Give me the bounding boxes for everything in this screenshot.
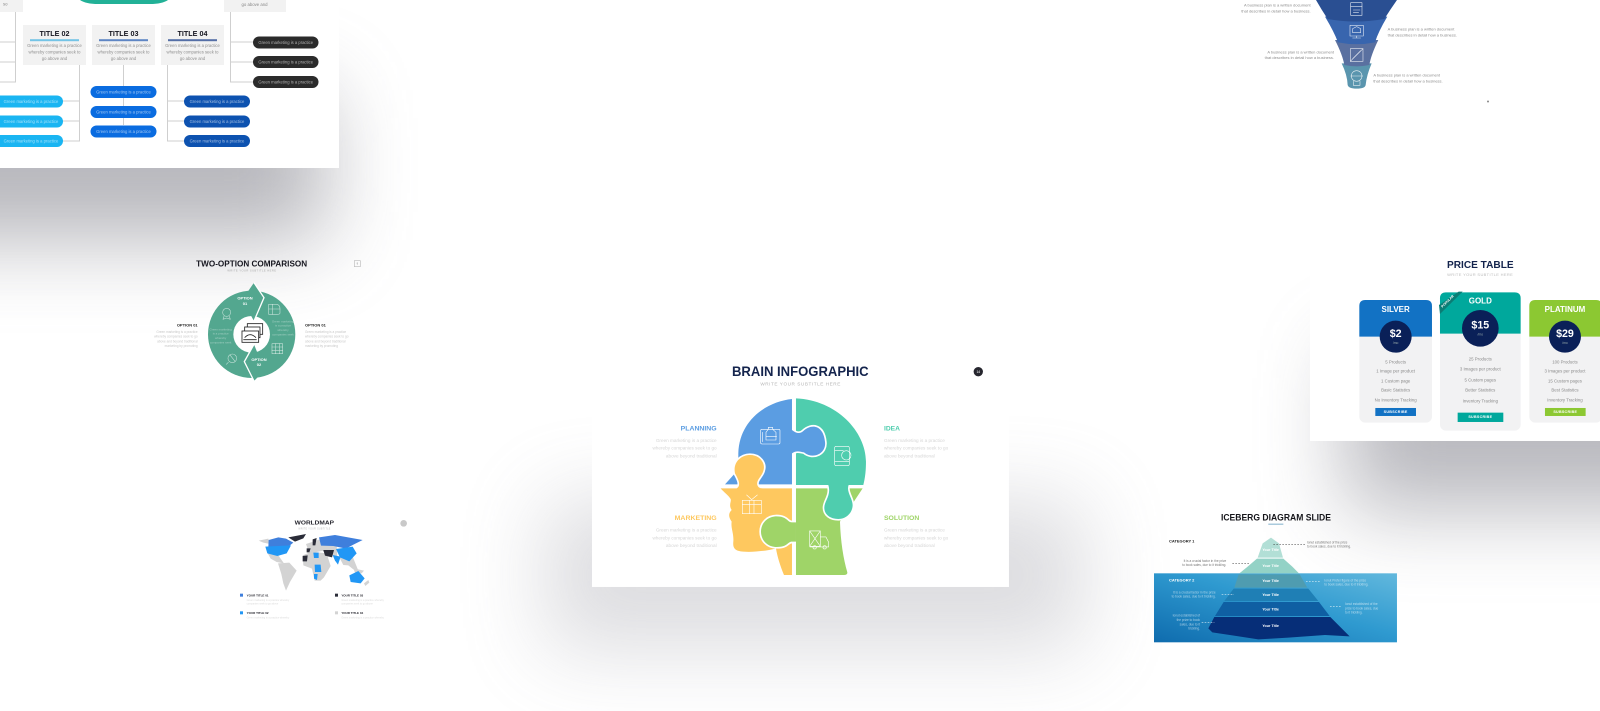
option labels: marketing by promoting [305,344,338,348]
card: silver: No Inventory Tracking [1375,397,1417,402]
heading: WORLDMAP [295,521,334,527]
label: planning: whereby companies seek to go [652,446,717,451]
title boxes: TITLE 04 [178,29,208,38]
category labels [1169,538,1195,583]
cycle chart: is a practice [275,324,291,328]
option labels: whereby companies seek to go [305,335,349,339]
heading: TWO-OPTION COMPARISON [196,258,307,268]
title boxes: go above and [180,56,206,61]
funnel notes: A business plan is a written document [1267,49,1335,54]
card: silver: SUBSCRIBE [1384,410,1408,414]
panel: brain infographic [592,355,1009,587]
card: silver: 1 Image per product [1376,369,1416,374]
card: gold: GOLD [1469,296,1492,305]
connector lines [0,12,253,141]
pills: Green marketing is a practice [96,90,152,94]
pills: Green marketing is a practice [96,110,152,114]
label: planning: above beyond traditional [666,453,717,458]
panel: iceberg diagram [1154,512,1397,642]
option labels: above and beyond traditional [157,339,198,343]
card: gold: Inventory Tracking [1463,398,1499,403]
iceberg layers: Your Title [1262,564,1279,568]
label: solution [884,515,949,548]
page number box [354,261,360,267]
card: silver: SILVER [1382,305,1410,314]
subtitle: WRITE YOUR SUBTITLE HERE [760,382,840,387]
label: planning [652,426,717,458]
funnel icons [1350,3,1363,85]
card: gold: 3 Images per product [1460,367,1502,372]
callouts: sales, due to it [1180,622,1200,626]
legend [240,593,385,620]
callouts: trickling. [1188,627,1200,631]
legend: YOUR TITLE 03 [341,593,364,597]
label: marketing: whereby companies seek to go [652,535,717,540]
icon: truck [810,531,829,549]
page dot [1487,100,1489,102]
heading: BRAIN INFOGRAPHIC [732,363,869,379]
legend: YOUR TITLE 01 [247,593,269,597]
label: idea: IDEA [884,426,900,433]
label: idea: Green marketing is a practice [884,438,945,443]
iceberg layers: Your Title [1262,579,1279,583]
option labels: above and beyond traditional [305,339,346,343]
cycle chart: companies seek [272,332,294,336]
subtitle: WRITE YOUR SUBTITLE HERE [227,269,276,273]
callouts: to book sales, due to it trickling. [1172,594,1216,598]
card: platinum: /mo [1562,341,1568,345]
legend: YOUR TITLE 04 [341,611,364,615]
title boxes: so [3,2,8,6]
card: silver [1359,300,1432,423]
callouts: It is a crucial factor in the prize [1173,590,1216,594]
cycle chart: 02 [257,362,262,367]
pills: Green marketing is a practice [258,40,314,45]
panel: org chart [0,0,339,168]
legend: companies seek to go above [247,603,279,606]
legend: Green marketing is a practice whereby [341,599,385,602]
callouts: the prize to book [1177,618,1200,622]
panel: world map [240,520,407,620]
funnel notes: that describes in detail how a business. [1388,32,1457,37]
pills: Green marketing is a practice [190,138,245,144]
callouts: to book sales, due to it trickling. [1182,563,1226,567]
pills: Green marketing is a practice [190,99,245,104]
background shadows [0,90,1600,650]
label: planning: PLANNING [681,426,717,433]
pills [0,36,318,147]
pills: Green marketing is a practice [96,129,152,134]
page number [400,520,407,527]
iceberg layers: Your Title [1262,608,1279,612]
map [259,534,369,591]
subtitle: WRITE YOUR SUBTITLE HERE [1447,272,1513,277]
card: silver: $2 [1390,328,1402,340]
iceberg layers: Your Title [1262,624,1279,628]
option labels: marketing by promoting [165,344,198,348]
cycle chart: Green marketing [210,327,232,331]
card: silver: Basic Statistics [1381,388,1410,393]
option labels: whereby companies seek to go [154,335,198,339]
option labels: OPTION 01 [177,322,198,327]
title boxes: Green marketing is a practice [96,43,152,48]
label: marketing: above beyond traditional [666,543,717,548]
card: silver: /mo [1393,341,1399,345]
callouts: Ionut established of [1173,614,1200,618]
title boxes: go above and [241,2,268,7]
subtitle: WRITE YOUR SUBTITLE [298,529,331,531]
pills: Green marketing is a practice [4,138,59,144]
funnel notes: A business plan is a written document [1373,73,1441,78]
option labels: Green marketing is a practice [305,330,346,334]
cycle chart: OPTION [237,296,253,301]
category labels: CATEGORY 2 [1169,578,1195,583]
title boxes: go above and [42,56,68,61]
callouts: Ionut established of the [1345,602,1378,606]
callouts: to it trickling. [1345,611,1363,615]
cycle chart [208,283,295,381]
page number: 14 [976,370,980,374]
cycle chart: 01 [243,301,248,306]
funnel bands [1316,0,1397,89]
cycle chart: whereby [215,336,227,340]
card: gold: Better Statistics [1465,388,1495,393]
label: marketing: MARKETING [675,515,717,522]
title boxes: TITLE 03 [108,29,138,38]
cycle chart: OPTION [251,357,267,362]
label: planning: Green marketing is a practice [656,438,717,443]
label: solution: Green marketing is a practice [884,528,945,533]
card: gold: /mo [1478,333,1483,337]
card: platinum [1529,300,1600,423]
option labels: Green marketing is a practice [156,330,198,334]
card: platinum: SUBSCRIBE [1553,410,1578,414]
page number [974,367,983,376]
pills: Green marketing is a practice [4,99,59,104]
icons [223,304,283,364]
cycle chart: is a practice [213,332,229,336]
card: platinum: PLATINUM [1545,305,1586,314]
icon: phone [835,446,851,466]
icon: gift [742,495,761,514]
icon: bag [761,427,780,444]
card: platinum: Best Statistics [1551,388,1579,393]
title boxes: whereby companies seek to [29,50,81,54]
water [1154,573,1397,642]
legend: Green marketing is a practice whereby [247,599,290,602]
card: platinum: $29 [1556,328,1574,340]
cycle chart: whereby [277,328,289,332]
callouts: Ionut established of the prize [1307,541,1348,545]
puzzle head [721,398,866,575]
card: platinum: Inventory Tracking [1547,397,1583,402]
card: gold: $15 [1471,319,1489,331]
label: solution: SOLUTION [884,515,919,522]
callouts: prize to book sales, due [1345,606,1379,610]
ribbon: popular: POPULAR [1440,294,1455,308]
legend: Green marketing is a practice whereby [341,617,385,620]
title boxes: whereby companies seek to [167,50,219,54]
callouts: to book sales, due to it trickling. [1307,545,1351,549]
category labels: CATEGORY 1 [1169,538,1195,543]
funnel notes: that describes in detail how a business. [1265,55,1334,60]
legend: YOUR TITLE 02 [247,611,269,615]
label: marketing [652,515,717,548]
legend: companies seek to go above [341,603,374,606]
callouts [1172,541,1379,631]
label: marketing: Green marketing is a practice [656,528,717,533]
panel: funnel [1241,0,1457,89]
callouts: It is a crucial factor in the prize [1184,559,1227,563]
funnel notes: A business plan is a written document [1244,3,1312,8]
funnel notes: A business plan is a written document [1388,27,1455,32]
label: solution: whereby companies seek to go [884,535,949,540]
option labels [154,322,349,348]
iceberg layers [1208,538,1350,639]
pills: Green marketing is a practice [4,119,59,124]
iceberg layers: Your Title [1262,593,1279,597]
card: gold: SUBSCRIBE [1468,415,1493,419]
funnel notes [1241,3,1457,83]
label: idea: above beyond traditional [884,453,935,458]
funnel notes: that describes in detail how a business. [1241,8,1311,13]
card: gold: 25 Products [1469,356,1492,361]
card: platinum: 15 Custom pages [1548,378,1582,383]
card: silver: 5 Products [1385,359,1406,364]
callouts: Ionut Prefer figure of the prize [1324,578,1366,582]
panel: two-option comparison [154,258,360,381]
title boxes: TITLE 02 [40,29,70,38]
label: idea: whereby companies seek to go [884,446,949,451]
iceberg layers: Your Title [1262,548,1279,552]
legend: Green marketing is a practice whereby [247,617,290,620]
panel: price table [1310,250,1600,441]
title boxes: Green marketing is a practice [27,43,83,48]
pills: Green marketing is a practice [258,60,314,64]
title boxes: whereby companies seek to [98,50,150,54]
funnel notes: that describes in detail how a business. [1373,78,1443,83]
pills: Green marketing is a practice [258,80,314,84]
center icon [242,324,263,342]
label: idea [884,426,949,458]
page number box: 9 [357,262,359,266]
title boxes: go above and [111,56,137,61]
card: platinum: 3 Images per product [1545,369,1586,374]
card: platinum: 100 Products [1552,359,1578,364]
option labels: OPTION 01 [305,322,327,327]
title boxes [0,0,286,65]
heading: PRICE TABLE [1447,260,1514,271]
label: solution: above beyond traditional [884,543,935,548]
callouts: to book sales, due to it trickling. [1324,582,1368,586]
cycle chart: Green marketing [272,319,294,323]
card: gold [1439,292,1521,431]
card: silver: 1 Custom page [1381,378,1411,383]
cycle chart: companies seek [210,340,232,344]
pills: Green marketing is a practice [190,119,245,124]
heading: ICEBERG DIAGRAM SLIDE [1221,512,1331,522]
title boxes: Green marketing is a practice [165,43,221,48]
card: gold: 5 Custom pages [1465,377,1496,382]
teal heading pill [80,0,168,4]
